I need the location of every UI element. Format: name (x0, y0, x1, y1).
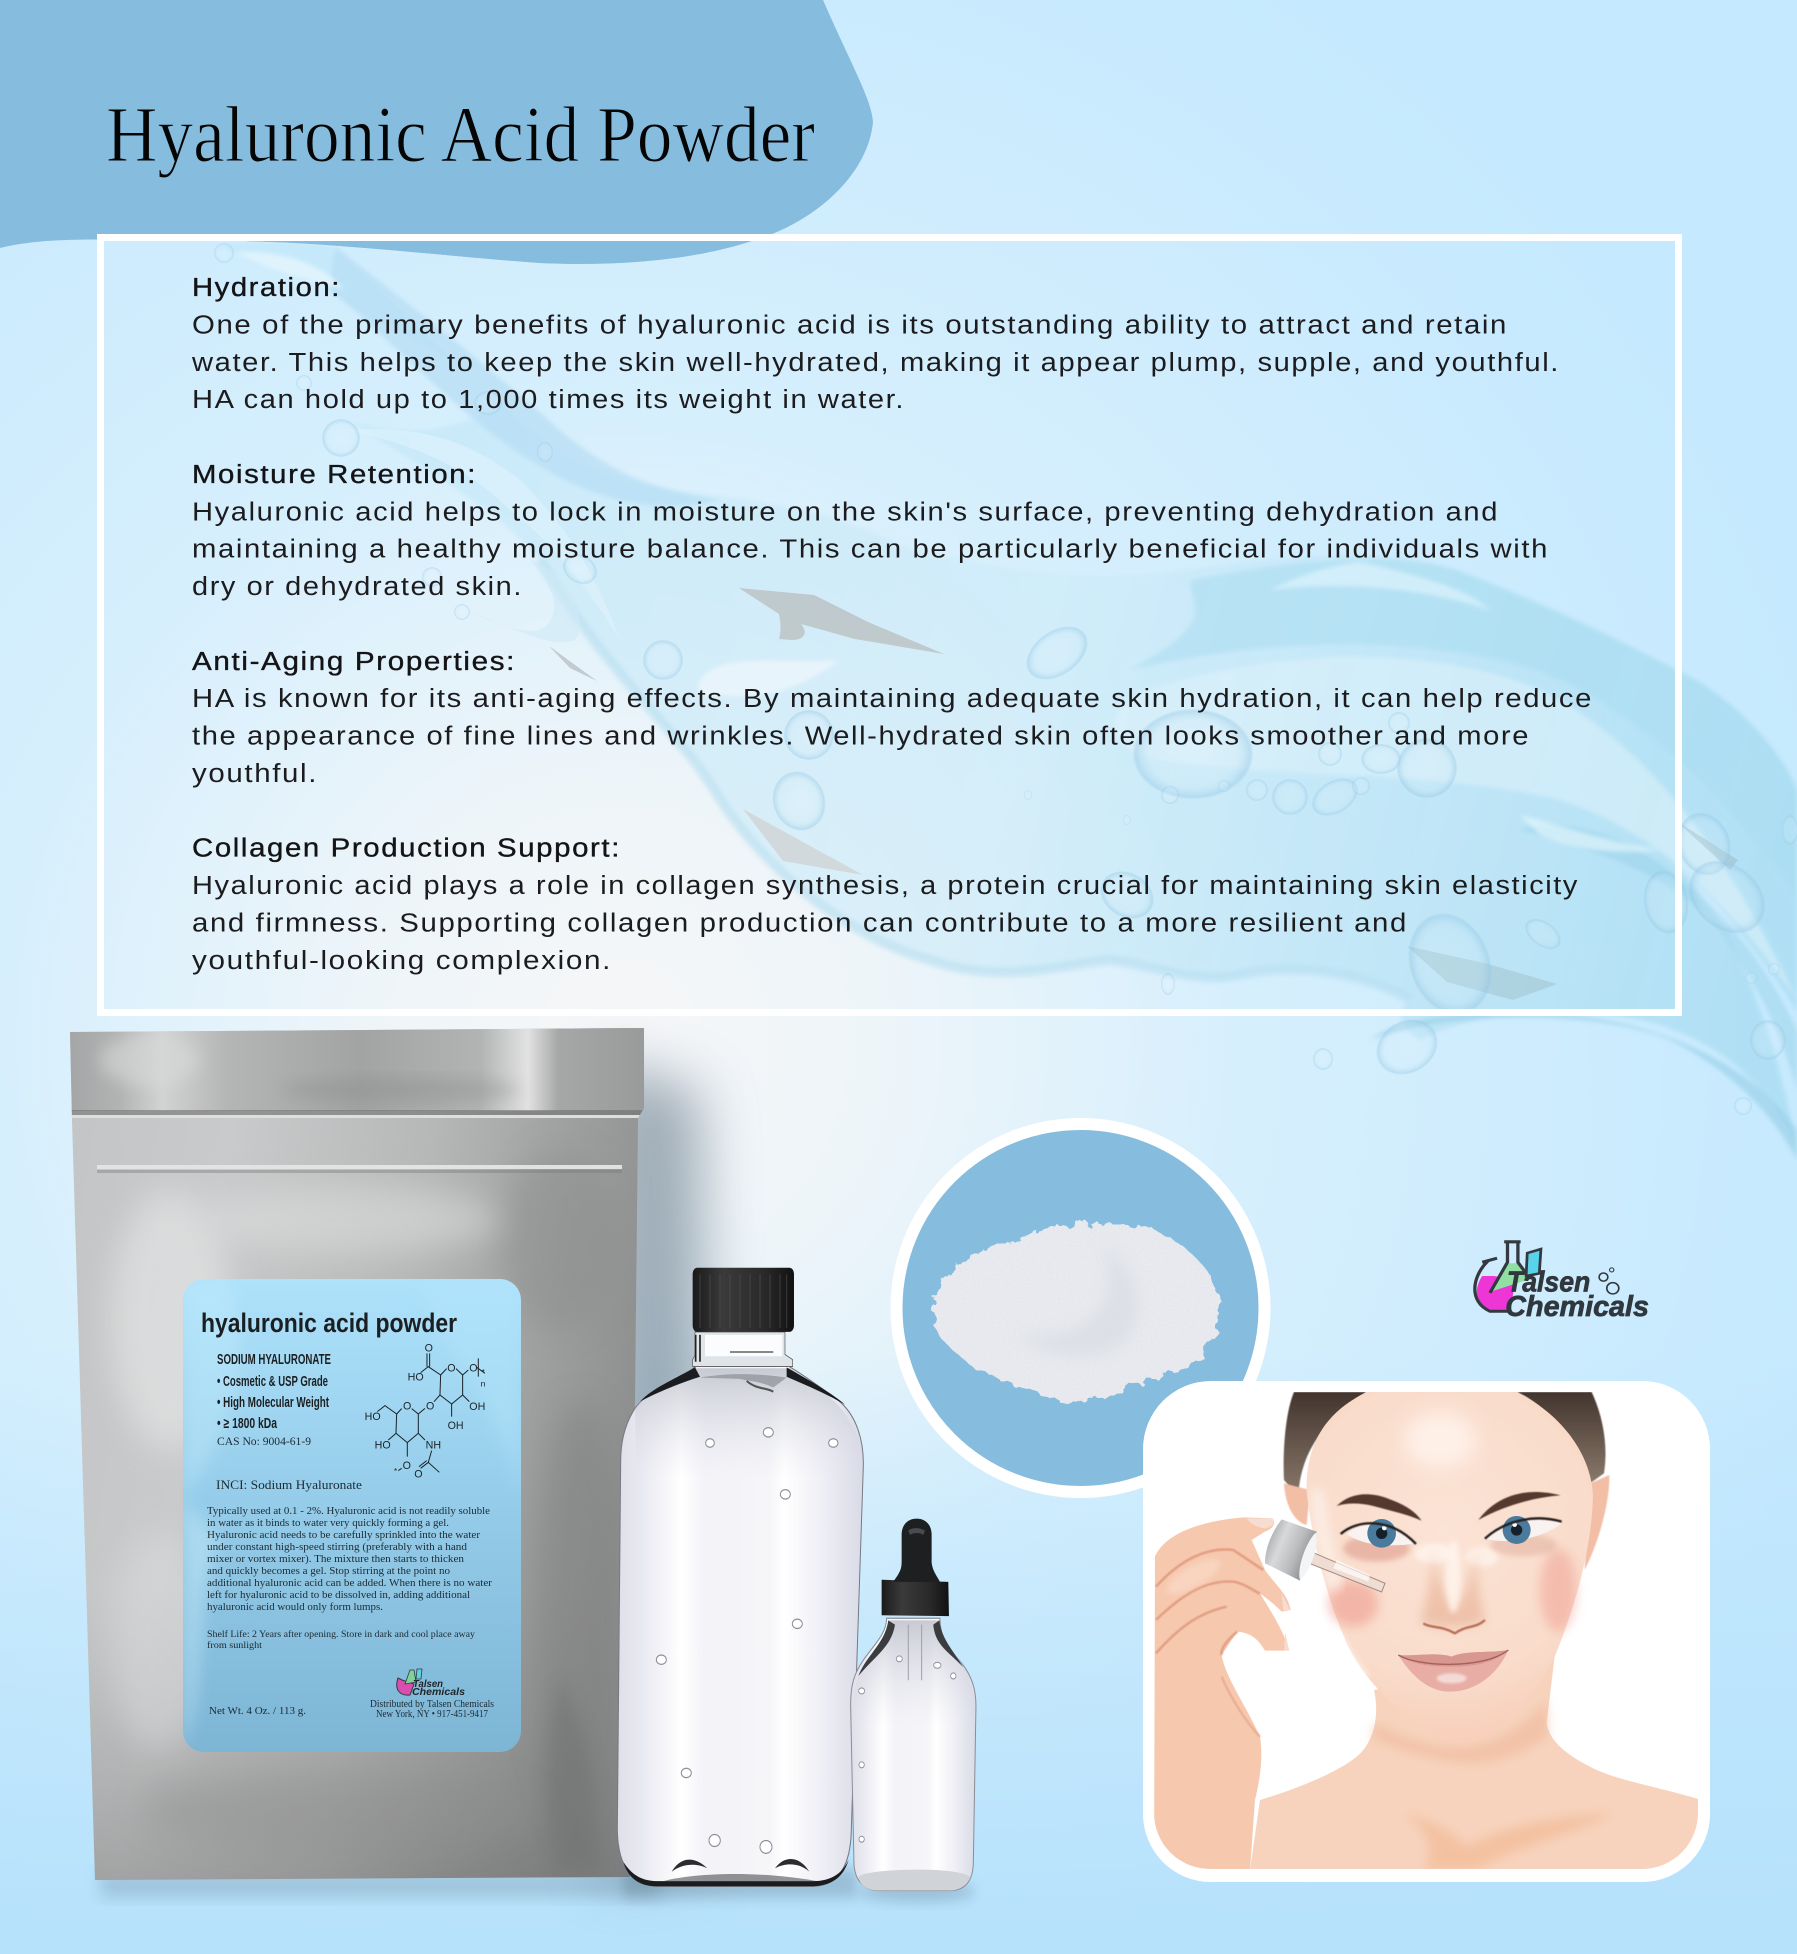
bottle body (617, 1366, 863, 1886)
label directions text: left for hyaluronic acid to be dissolved in, adding additional (207, 1589, 470, 1601)
logo: Talsen Chemicals: Chemicals (1505, 1291, 1649, 1323)
hair (1284, 1392, 1605, 1497)
blob edge over frame area (190, 241, 735, 264)
text block: anti-aging properties: Anti-Aging Properties: (192, 648, 516, 676)
title blob (0, 0, 873, 264)
text block: moisture retention (192, 461, 1549, 601)
label directions text: Shelf Life: 2 Years after opening. Store in dark and cool place away (207, 1629, 475, 1640)
label product specs: CAS No: 9004-61-9 (217, 1434, 311, 1448)
label heading: hyaluronic acid powder (201, 1308, 457, 1338)
text block: moisture retention: Moisture Retention: (192, 461, 477, 489)
chemical structure: n (481, 1379, 486, 1389)
chemical structure: OH (469, 1401, 485, 1413)
label directions text: and quickly becomes a gel. Stop stirring at the point no (207, 1565, 450, 1577)
bottle base (623, 1860, 849, 1886)
dropper collar (882, 1580, 949, 1616)
label directions text: Hyaluronic acid needs to be carefully sprinkled into the water (207, 1529, 480, 1541)
label net weight and distributor: New York, NY • 917-451-9417 (376, 1709, 488, 1720)
bottle shoulder highlights (635, 1368, 862, 1479)
label directions text (207, 1505, 492, 1651)
label product specs: • ≥ 1800 kDa (217, 1416, 278, 1432)
label net weight and distributor (209, 1699, 494, 1720)
chemical structure: O (469, 1362, 478, 1374)
logo: Talsen Chemicals: Talsen (1507, 1266, 1590, 1298)
text block: hydration (191, 274, 1560, 414)
dropper tool (1265, 1519, 1385, 1592)
label directions text: Typically used at 0.1 - 2%. Hyaluronic acid is not readily soluble (207, 1505, 490, 1517)
text block: hydration: HA can hold up to 1,000 times its weight in water. (192, 386, 905, 414)
shoulders and neck (1250, 1657, 1700, 1870)
face (1306, 1392, 1593, 1700)
text block: anti-aging properties: youthful. (192, 760, 318, 788)
bottle bubbles (656, 1428, 838, 1853)
chemical structure: HO (375, 1440, 391, 1452)
chemical structure: * (394, 1467, 397, 1476)
label directions text: in water as it binds to water very quickly forming a gel. (207, 1517, 449, 1529)
dropper rubber bulb (893, 1519, 940, 1582)
label product specs: SODIUM HYALURONATE (217, 1352, 331, 1368)
label small logo (397, 1669, 465, 1698)
text block: moisture retention: Hyaluronic acid helps to lock in moisture on the skin's surface, preventing dehydration and (192, 498, 1499, 526)
text block: hydration: Hydration: (192, 274, 341, 302)
bottle cap (693, 1268, 794, 1332)
text block: anti-aging properties: the appearance of fine lines and wrinkles. Well-hydrated skin often looks smoother and more (192, 723, 1530, 751)
label small logo: Talsen (413, 1678, 443, 1690)
label directions text: additional hyaluronic acid can be added. When there is no water (207, 1577, 492, 1589)
chemical structure: HO (408, 1372, 424, 1384)
water bubbles (214, 243, 1797, 1115)
text block: collagen production support (192, 835, 1579, 975)
title: Hyaluronic Acid Powder (106, 92, 815, 179)
label product specs (216, 1352, 362, 1492)
text block: collagen production support: youthful-looking complexion. (192, 947, 612, 975)
logo: Talsen Chemicals (1475, 1242, 1649, 1323)
chemical structure: O (447, 1363, 456, 1375)
ears (1284, 1475, 1609, 1570)
product label (183, 1279, 521, 1752)
chemical structure: * (482, 1368, 485, 1377)
dropper bottle (851, 1519, 977, 1902)
eyes (1341, 1516, 1562, 1562)
text block: collagen production support: Collagen Production Support: (192, 835, 621, 863)
dropper body (851, 1618, 976, 1891)
chemical structure (365, 1343, 486, 1480)
large bottle (617, 1268, 863, 1898)
text block: moisture retention: maintaining a healthy moisture balance. This can be particularly beneficial for individuals with (192, 536, 1549, 564)
chemical structure: O (403, 1460, 411, 1472)
chemical structure: OH (448, 1420, 464, 1432)
text block: anti-aging properties (192, 648, 1593, 788)
photo card: woman applying serum (1143, 1381, 1710, 1882)
lips (1398, 1650, 1508, 1692)
water splash illustration (214, 242, 1797, 1160)
label product specs: • High Molecular Weight (217, 1395, 329, 1411)
text block: hydration: water. This helps to keep the skin well-hydrated, making it appear plump, supple, and youthful. (191, 349, 1560, 377)
product shadow (100, 1060, 720, 1898)
label directions text: hyaluronic acid would only form lumps. (207, 1601, 383, 1613)
label directions text: from sunlight (207, 1640, 262, 1651)
chemical structure: O (403, 1401, 411, 1413)
label directions text: mixer or vortex mixer). The mixture then starts to thicken (207, 1553, 465, 1565)
chemical structure: NH (426, 1440, 441, 1452)
text block: hydration: One of the primary benefits of hyaluronic acid is its outstanding ability to attract and retain (192, 311, 1508, 339)
text block: moisture retention: dry or dehydrated skin. (192, 573, 523, 601)
foil pouch (60, 1020, 660, 1890)
chemical structure: HO (365, 1411, 381, 1423)
panel: benefits text (191, 274, 1593, 975)
text block: collagen production support: Hyaluronic acid plays a role in collagen synthesis, a protein crucial for maintaining skin elasticity (192, 872, 1579, 900)
label net weight and distributor: Net Wt. 4 Oz. / 113 g. (209, 1706, 306, 1717)
chemical structure: O (425, 1343, 433, 1355)
label directions text: under constant high-speed stirring (preferably with a hand (207, 1541, 468, 1553)
label small logo: Chemicals (412, 1686, 465, 1698)
label product specs: INCI: Sodium Hyaluronate (216, 1477, 362, 1492)
panel: benefits frame (100, 238, 1678, 1012)
text block: anti-aging properties: HA is known for its anti-aging effects. By maintaining adequate skin hydration, it can help reduce (192, 685, 1593, 713)
chemical structure: O (426, 1401, 434, 1413)
powder pile (932, 1223, 1219, 1404)
nose (1421, 1540, 1485, 1633)
label product specs: • Cosmetic & USP Grade (217, 1374, 328, 1390)
bottle neck (693, 1332, 793, 1367)
label net weight and distributor: Distributed by Talsen Chemicals (370, 1699, 494, 1710)
hand (1154, 1517, 1291, 1870)
gray shards (549, 588, 1738, 1000)
text block: collagen production support: and firmness. Supporting collagen production can contribute to a more resilient and (192, 910, 1408, 938)
chemical structure: O (414, 1468, 423, 1480)
eyebrows (1337, 1492, 1561, 1521)
powder circle (896, 1124, 1264, 1492)
